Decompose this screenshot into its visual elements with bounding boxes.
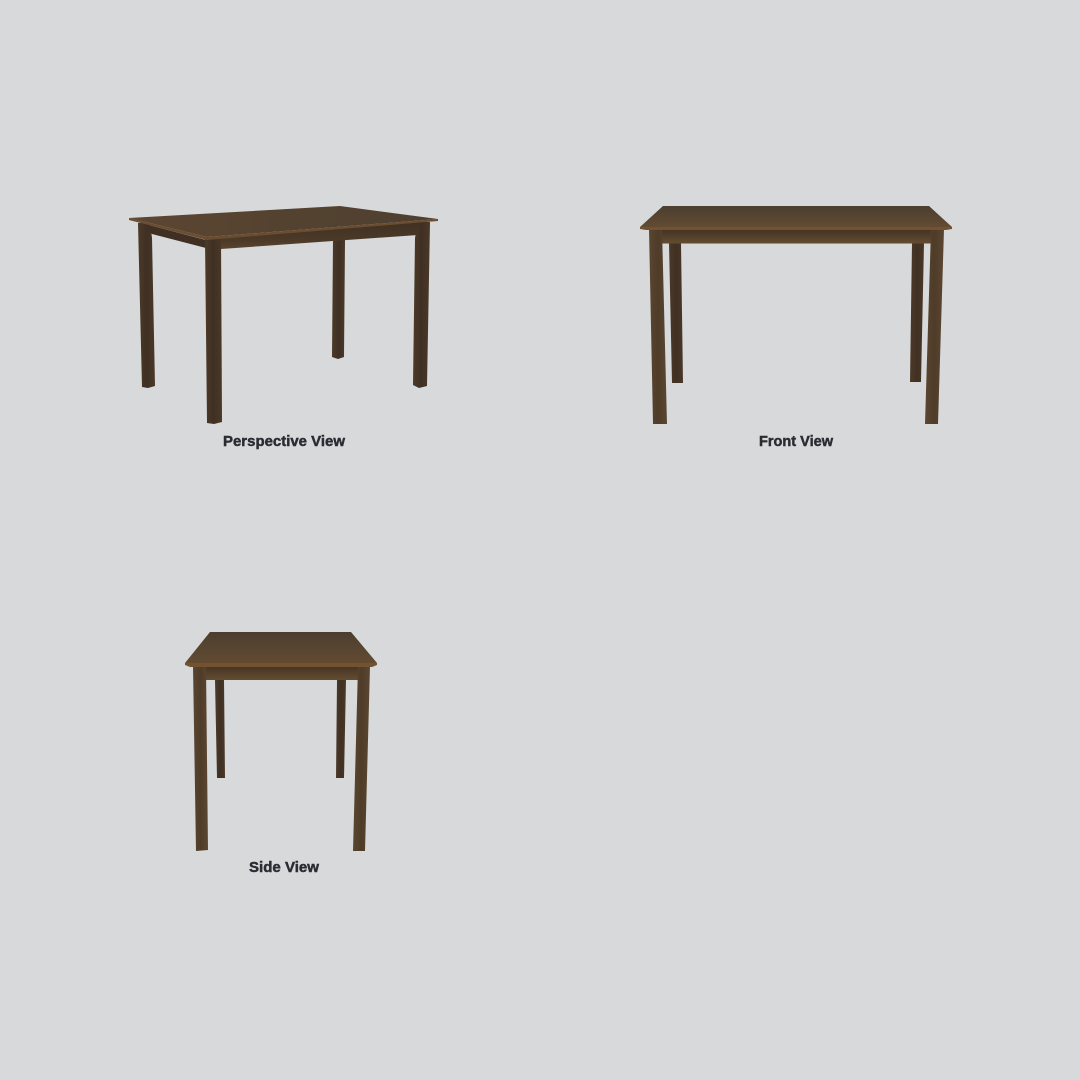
- label: side view: Side View: [249, 860, 320, 876]
- back left leg: [215, 680, 225, 778]
- right leg: [413, 222, 430, 388]
- panel: perspective view: [129, 206, 438, 424]
- back left leg: [669, 243, 683, 383]
- label: perspective view: Perspective View: [223, 434, 346, 450]
- back right leg: [910, 243, 924, 382]
- apron: [204, 666, 360, 680]
- front left leg: [649, 229, 667, 424]
- back right leg: [336, 680, 346, 778]
- panel: front view: [640, 206, 952, 424]
- label: front view: Front View: [759, 434, 834, 450]
- table top surface: [185, 632, 377, 663]
- left leg: [138, 223, 155, 388]
- table top surface: [640, 206, 952, 227]
- right apron: [219, 222, 419, 249]
- table top edge: [640, 227, 952, 230]
- front leg: [205, 238, 222, 424]
- front right leg: [925, 229, 944, 424]
- table top surface: [129, 206, 438, 237]
- apron: [660, 230, 932, 244]
- table top edge: [185, 663, 377, 667]
- left front leg: [193, 666, 208, 851]
- back leg: [332, 240, 345, 359]
- table top edge: [129, 218, 438, 240]
- left apron: [145, 224, 206, 248]
- right front leg: [353, 666, 370, 851]
- panel: side view: [185, 632, 377, 851]
